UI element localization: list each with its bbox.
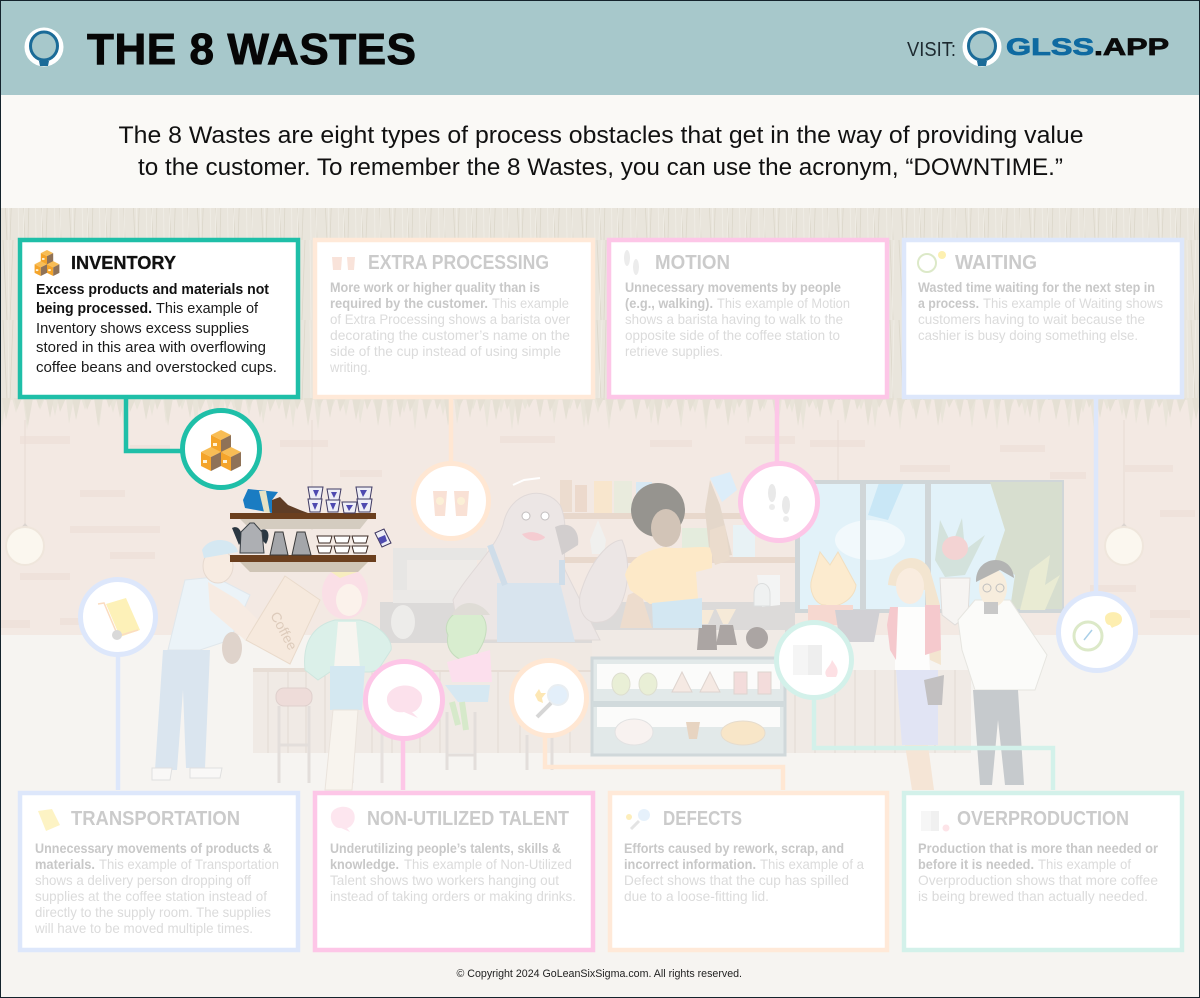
body: extra processing: decorating the customer’s name on the bbox=[330, 327, 570, 343]
body: motion: Unnecessary movements by people bbox=[625, 279, 841, 295]
illustration: pastry display case bbox=[592, 658, 785, 755]
shelves: full-colour inventory example bbox=[230, 487, 391, 572]
visit logo: GLSS bbox=[1006, 34, 1094, 61]
body: waiting: cashier is busy doing something else. bbox=[918, 327, 1138, 343]
body: waiting: a process. bbox=[918, 295, 979, 311]
body: extra processing: writing. bbox=[329, 359, 371, 375]
heading: waiting: WAITING bbox=[955, 252, 1037, 274]
body: non-utilized talent: knowledge. bbox=[330, 856, 399, 872]
icon: footprints bbox=[624, 250, 639, 275]
cups bbox=[308, 487, 372, 513]
marker: motion bbox=[740, 464, 818, 540]
body: inventory bbox=[36, 281, 277, 376]
icon: magnifier bbox=[626, 809, 650, 829]
heading: non-utilized talent: NON-UTILIZED TALENT bbox=[367, 808, 569, 830]
card: waiting bbox=[904, 240, 1182, 397]
body: motion: This example of Motion bbox=[717, 295, 850, 311]
illustration: server with pink hair bbox=[305, 563, 415, 790]
body: waiting: customers having to wait because the bbox=[918, 311, 1145, 327]
card: inventory bbox=[20, 240, 298, 397]
illustration: fox cashier and register bbox=[808, 552, 880, 642]
heading: inventory: INVENTORY bbox=[71, 253, 176, 273]
body: extra processing: required by the customer. bbox=[330, 295, 488, 311]
heading: defects: DEFECTS bbox=[663, 808, 742, 830]
body: non-utilized talent: Underutilizing people’s talents, skills & bbox=[330, 840, 561, 856]
body: overproduction: before it is needed. bbox=[918, 856, 1034, 872]
marker: non-utilized talent bbox=[366, 662, 442, 738]
marker: inventory bbox=[182, 410, 260, 488]
heading: motion: MOTION bbox=[655, 252, 730, 274]
connector lines bbox=[118, 398, 1096, 790]
illustration: frog on stool bbox=[445, 603, 492, 730]
visit logo: VISIT: bbox=[907, 39, 956, 61]
body: motion: shows a barista having to walk to the bbox=[625, 311, 843, 327]
body: transportation: directly to the supply room. The supplies bbox=[35, 904, 271, 920]
body: overproduction bbox=[918, 840, 1159, 904]
illustration: window and plants bbox=[795, 480, 1064, 625]
heading: transportation: TRANSPORTATION bbox=[71, 808, 240, 830]
body: extra processing: This example bbox=[492, 295, 569, 311]
marker: overproduction bbox=[776, 622, 852, 698]
kettles bbox=[232, 527, 268, 545]
body: inventory: being processed. bbox=[36, 300, 152, 317]
body: transportation: Unnecessary movements of products & bbox=[35, 840, 272, 856]
hanging lamps bbox=[6, 420, 1143, 565]
body: non-utilized talent bbox=[330, 840, 576, 904]
body: motion: opposite side of the coffee station to bbox=[625, 327, 840, 343]
icon: cups bbox=[332, 257, 355, 270]
illustration: coffee pots on counter bbox=[696, 584, 770, 650]
body: inventory: This example of bbox=[156, 300, 259, 317]
body: non-utilized talent: This example of Non-Utilized bbox=[404, 856, 572, 872]
body: inventory: stored in this area with overflowing bbox=[36, 339, 266, 356]
body: non-utilized talent: Talent shows two workers hanging out bbox=[330, 872, 559, 888]
header band bbox=[0, 0, 1200, 95]
copyright: © Copyright 2024 GoLeanSixSigma.com. All rights reserved. bbox=[456, 968, 742, 980]
body: waiting: This example of Waiting shows bbox=[983, 295, 1163, 311]
body: transportation: will have to be moved multiple times. bbox=[34, 920, 253, 936]
coffee bag bbox=[243, 489, 278, 513]
body: extra processing: of Extra Processing shows a barista over bbox=[330, 311, 570, 327]
icon: boxes bbox=[35, 250, 59, 276]
illustration: afro barista bbox=[620, 483, 730, 628]
falling cup bbox=[375, 529, 391, 547]
card: non-utilized talent bbox=[315, 793, 593, 950]
visit logo: .APP bbox=[1094, 34, 1169, 61]
body: motion bbox=[625, 279, 850, 359]
icon: clock bbox=[918, 251, 946, 272]
title: THE 8 WASTES bbox=[87, 25, 416, 74]
body: inventory: Inventory shows excess supplies bbox=[36, 320, 249, 337]
body: defects: incorrect information. bbox=[624, 856, 756, 872]
body: transportation: supplies at the coffee station instead of bbox=[35, 888, 267, 904]
card: transportation bbox=[20, 793, 298, 950]
body: non-utilized talent: instead of taking orders or making drinks. bbox=[330, 888, 576, 904]
body: waiting bbox=[918, 279, 1163, 343]
body: transportation: shows a delivery person dropping off bbox=[35, 872, 251, 888]
intro panel: to the customer. To remember the 8 Wastes, you can use the acronym, “DOWNTIME.” bbox=[138, 154, 1063, 181]
card: extra processing bbox=[315, 240, 593, 397]
visit logo bbox=[907, 28, 1169, 66]
heading: overproduction: OVERPRODUCTION bbox=[957, 808, 1129, 830]
body: overproduction: is being brewed than actually needed. bbox=[918, 888, 1148, 904]
body: inventory: Excess products and materials not bbox=[36, 281, 269, 298]
marker: transportation bbox=[80, 580, 156, 654]
card: motion bbox=[609, 240, 887, 397]
drippers bbox=[317, 536, 368, 553]
card: defects bbox=[610, 793, 887, 950]
body: transportation bbox=[34, 840, 279, 936]
body: overproduction: Overproduction shows that more coffee bbox=[918, 872, 1158, 888]
body: defects: This example of a bbox=[760, 856, 864, 872]
body: extra processing: side of the cup instead of using simple bbox=[330, 343, 561, 359]
body: overproduction: Production that is more than needed or bbox=[918, 840, 1159, 856]
body: motion: retrieve supplies. bbox=[625, 343, 723, 359]
illustration: back bar and shelves bbox=[380, 472, 797, 643]
body: waiting: Wasted time waiting for the next step in bbox=[918, 279, 1155, 295]
body: overproduction: This example of bbox=[1038, 856, 1131, 872]
body: transportation: This example of Transportation bbox=[99, 856, 279, 872]
marker: waiting bbox=[1058, 594, 1136, 670]
body: extra processing: More work or higher quality than is bbox=[330, 279, 540, 295]
body: defects: due to a loose-fitting lid. bbox=[624, 888, 769, 904]
intro panel bbox=[0, 95, 1200, 208]
icon: logo bulb bbox=[24, 28, 64, 66]
illustration: counters and stools bbox=[253, 630, 971, 783]
icon: brain bbox=[331, 807, 355, 832]
heading: extra processing: EXTRA PROCESSING bbox=[368, 252, 549, 274]
icon: hand truck bbox=[38, 809, 60, 831]
body: motion: (e.g., walking). bbox=[625, 295, 713, 311]
background: wall, floor and thatch bbox=[0, 208, 1200, 998]
body: defects: Efforts caused by rework, scrap, and bbox=[624, 840, 844, 856]
intro panel: The 8 Wastes are eight types of process obstacles that get in the way of providing value bbox=[118, 122, 1084, 149]
marker: extra processing bbox=[414, 464, 488, 538]
icon: coffee machine bbox=[921, 811, 950, 832]
body: defects bbox=[624, 840, 864, 904]
illustration: seal barista bbox=[453, 478, 628, 642]
illustration: delivery person: Coffee bbox=[267, 609, 301, 653]
body: transportation: materials. bbox=[35, 856, 95, 872]
marker: defects bbox=[512, 660, 586, 736]
card: overproduction bbox=[904, 793, 1182, 950]
illustration: delivery person bbox=[152, 540, 320, 780]
body: inventory: coffee beans and overstocked cups. bbox=[36, 359, 277, 376]
body: extra processing bbox=[329, 279, 570, 375]
body: defects: Defect shows that the cup has spilled bbox=[624, 872, 849, 888]
illustration: waiting customers bbox=[887, 558, 1047, 790]
